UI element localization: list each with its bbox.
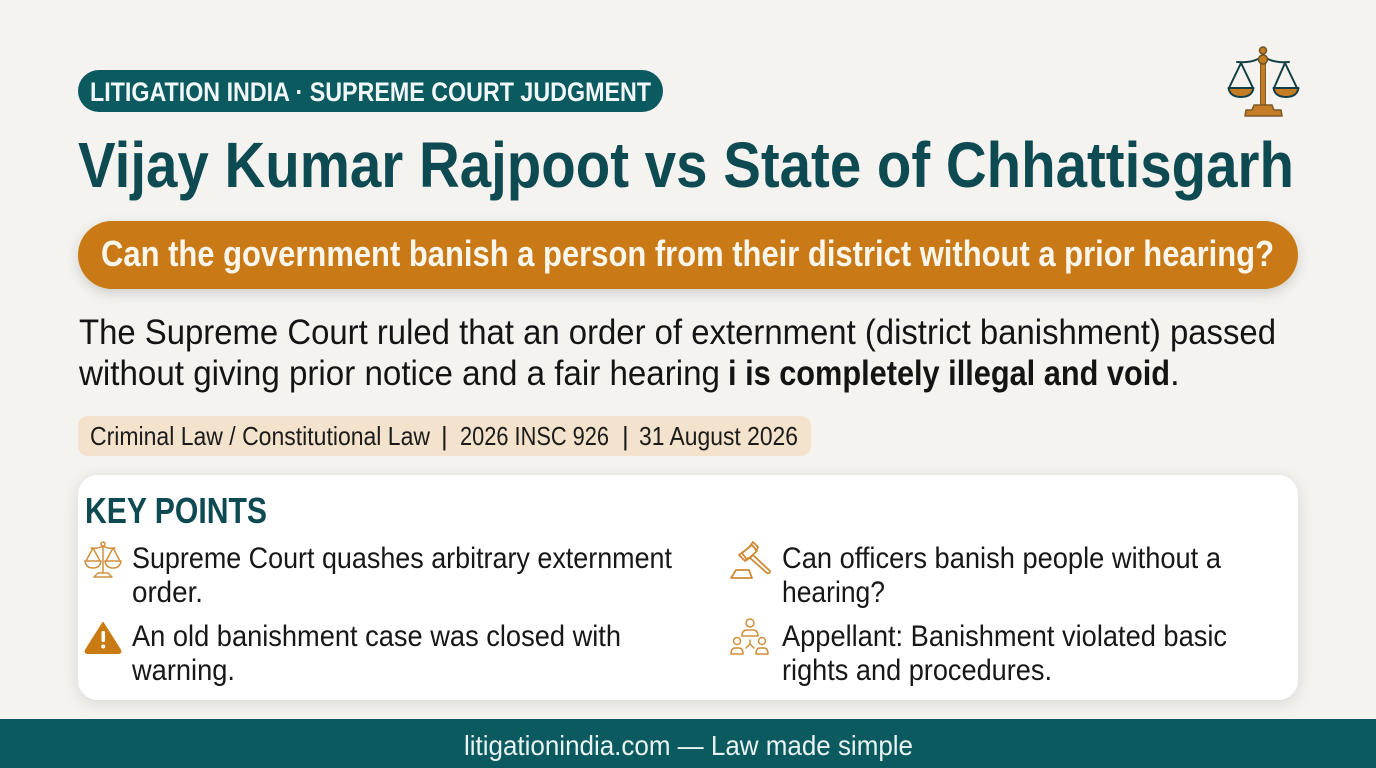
header tag pill: LITIGATION INDIA · SUPREME COURT JUDGMENT [90,77,651,107]
case metadata pill: | [622,421,629,451]
case metadata pill [78,416,811,456]
point 3 text: Can officers banish people without a [782,542,1221,575]
point 2 text: warning. [131,654,235,687]
header tag pill [78,70,663,112]
ruling summary: without giving prior notice and a fair hearing [78,354,720,393]
case metadata pill: 2026 INSC 926 [460,421,609,451]
point 4 text: rights and procedures. [782,654,1052,687]
footer bar [0,719,1376,768]
footer bar: litigationindia.com — Law made simple [464,730,913,761]
panel: key points [78,475,1298,700]
ruling summary: . [1170,354,1180,393]
case metadata pill: 31 August 2026 [639,421,798,451]
ruling summary: The Supreme Court ruled that an order of externment (district banishment) passed [79,313,1276,352]
point 3 text: hearing? [782,576,885,609]
icon: gavel [731,542,770,578]
question banner [78,221,1298,289]
key points heading: KEY POINTS [85,490,267,531]
icon: scales [85,542,121,577]
ruling summary [78,313,1276,393]
point 2 text: An old banishment case was closed with [132,620,621,653]
icon: scales of justice [1228,47,1298,116]
icon: warning [86,623,120,653]
icon: people network [731,619,768,654]
ruling summary: i is completely illegal and void [728,354,1170,393]
point 1 text: order. [132,576,203,609]
case metadata pill: Criminal Law / Constitutional Law [90,421,430,451]
case metadata pill: | [441,421,448,451]
point 1 text: Supreme Court quashes arbitrary externment [132,542,673,575]
point 4 text: Appellant: Banishment violated basic [782,620,1227,653]
